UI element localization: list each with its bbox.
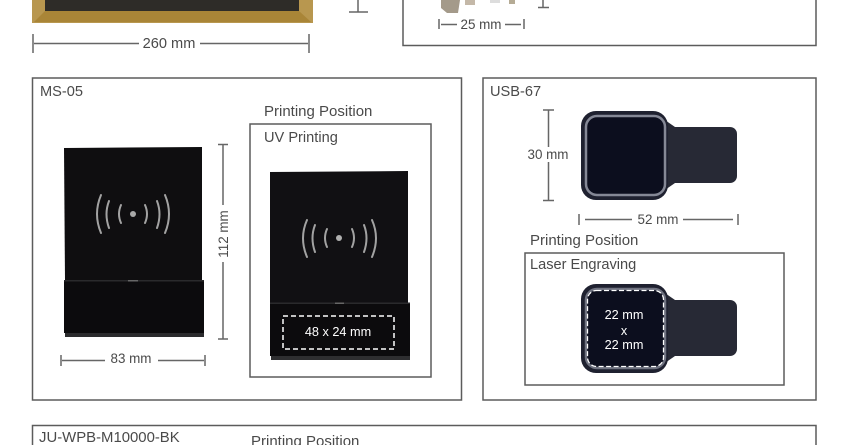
dimension: 260 mm — [33, 34, 309, 53]
panel: USB-67 — [483, 78, 816, 400]
dimension: 25 mm — [439, 17, 524, 32]
dimension: 52 mm — [579, 212, 738, 227]
panel: top right product — [403, 0, 816, 46]
dimension tick: box height — [349, 0, 368, 12]
print area: 48 x 24 mm: 48 x 24 mm — [305, 325, 371, 339]
panel: laser engraving — [525, 253, 784, 385]
dimension: 25 mm: 25 mm — [461, 17, 501, 32]
product: charger with print area — [270, 171, 410, 360]
product: MS-05 wireless charger — [64, 147, 204, 337]
dimension: 52 mm: 52 mm — [638, 212, 678, 227]
label: Laser Engraving: Laser Engraving — [530, 257, 636, 273]
panel: MS-05 — [32, 78, 462, 400]
dimension: 260 mm: 260 mm — [143, 36, 195, 52]
dimension: 112 mm: 112 mm — [216, 210, 231, 258]
dimension: 30 mm — [528, 110, 568, 200]
label: UV Printing: UV Printing — [264, 130, 338, 146]
product: gold gift box — [32, 0, 313, 23]
heading: MS-05: MS-05 — [40, 84, 83, 100]
print area: 22 x 22 mm: 22 mm — [605, 308, 643, 322]
panel: UV printing — [250, 124, 431, 377]
print area: 22 x 22 mm: 22 mm — [605, 338, 643, 352]
dimension: 83 mm: 83 mm — [111, 351, 151, 366]
dimension tick: small height — [538, 0, 549, 8]
product: metal parts — [441, 0, 515, 13]
product: USB drive with engraving area — [581, 284, 737, 373]
print area: 22 x 22 mm: x — [621, 324, 628, 338]
heading: printing position: Printing Position — [530, 232, 638, 249]
print area: 48 x 24 mm — [283, 316, 394, 349]
dimension: 112 mm — [216, 144, 231, 339]
heading: printing position: Printing Position — [264, 103, 372, 120]
dimension: 30 mm: 30 mm — [528, 147, 568, 162]
product: USB drive — [581, 111, 737, 200]
dimension: 83 mm — [61, 351, 205, 366]
heading: USB-67: USB-67 — [490, 84, 541, 100]
panel: JU-WPB-M10000-BK — [32, 426, 816, 445]
print area: 22 x 22 mm — [588, 290, 664, 366]
